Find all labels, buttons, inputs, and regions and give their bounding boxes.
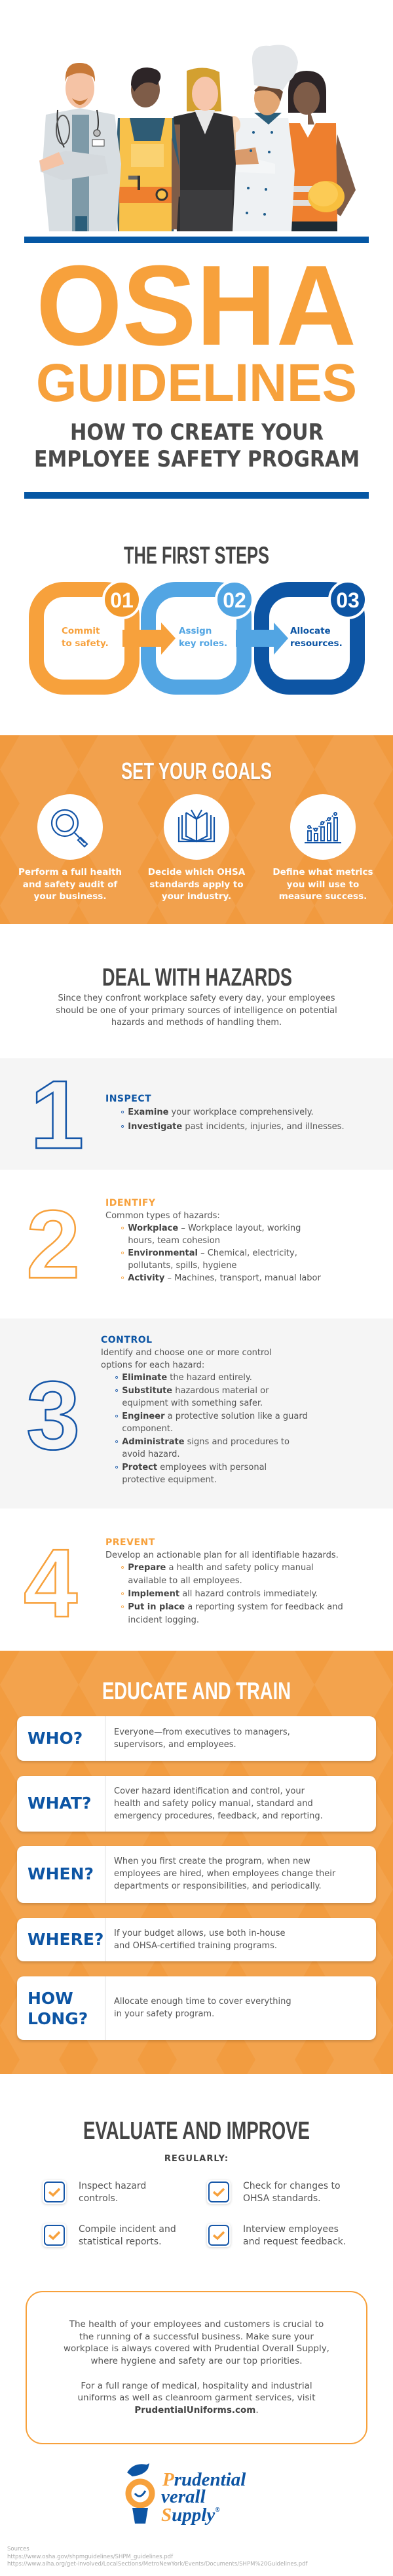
goal 1: audit: [18, 794, 122, 902]
prevent text: ∘ Put in place a reporting system for feedback and: [120, 1602, 343, 1612]
arrow 2: [236, 623, 288, 655]
logo: Prudential Overall Supply: [126, 2463, 246, 2526]
identify text: Common types of hazards:: [105, 1211, 220, 1221]
card: what: emergency procedures, feedback, and reporting.: [114, 1811, 323, 1821]
check item 2: OHSA standards.: [243, 2193, 321, 2204]
panel: 1 inspect: [0, 1058, 393, 1170]
identify text: pollutants, spills, hygiene: [128, 1261, 236, 1271]
card: where: [17, 1918, 376, 1961]
goal 1: audit: your business.: [34, 891, 106, 902]
hazards intro text: should be one of your primary sources of intelligence on potential: [56, 1006, 337, 1016]
card: who: Everyone—from executives to managers,: [114, 1727, 290, 1737]
check item 4: Interview employees: [243, 2224, 339, 2235]
figure: businesswoman: [172, 67, 236, 231]
check item 1: controls.: [79, 2193, 118, 2204]
card: when: [17, 1846, 376, 1903]
panel: 3 control: [0, 1318, 393, 1509]
goal 2: standards: your industry.: [162, 891, 231, 902]
callout: closing message: the running of a successful business. Make sure your: [79, 2332, 314, 2342]
control text: ∘ Administrate signs and procedures to: [114, 1436, 290, 1447]
control text: component.: [122, 1424, 173, 1434]
sources: Sources: [7, 2546, 29, 2552]
badge 02: 02: [223, 588, 246, 612]
step labels: Commit: [62, 626, 100, 636]
card: how long: Allocate enough time to cover everything: [114, 1997, 291, 2007]
check item 1: [41, 2180, 146, 2206]
card: how long: [17, 1976, 376, 2040]
step labels: Assign: [179, 626, 212, 636]
identify text: ∘ Workplace – Workplace layout, working: [120, 1223, 301, 1233]
prevent text: Develop an actionable plan for all identifiable hazards.: [105, 1550, 339, 1560]
control text: Identify and choose one or more control: [101, 1348, 272, 1358]
goal 3: metrics: [272, 794, 373, 902]
card: where: WHERE?: [28, 1930, 103, 1949]
logo: Prudential Overall Supply: ®: [215, 2507, 220, 2514]
goal 1: audit: Perform a full health: [18, 867, 122, 877]
card: where: and OHSA-certified training programs.: [114, 1941, 277, 1951]
control text: CONTROL: [101, 1335, 153, 1345]
step 1 ring: [37, 590, 132, 687]
control text: equipment with something safer.: [122, 1398, 263, 1408]
control text: ∘ Substitute hazardous material or: [114, 1385, 269, 1396]
check item 3: [41, 2223, 176, 2249]
identify text: ∘ Activity – Machines, transport, manual labor: [120, 1273, 321, 1283]
regularly label: REGULARLY:: [164, 2154, 229, 2164]
card: who: [17, 1716, 376, 1761]
goal 1: audit: and safety audit of: [23, 879, 117, 890]
callout: closing message: PrudentialUniforms.com.: [134, 2405, 259, 2415]
control text: protective equipment.: [122, 1475, 217, 1485]
step labels: key roles.: [179, 638, 227, 649]
goal 2: standards: Decide which OHSA: [148, 867, 245, 877]
check item 1: Inspect hazard: [79, 2181, 146, 2191]
badge 03: [329, 581, 366, 618]
prevent text: PREVENT: [105, 1537, 155, 1548]
card: when: employees are hired, when employees change their: [114, 1869, 335, 1879]
card: what: Cover hazard identification and control, your: [114, 1786, 305, 1796]
panel: 2 identify: [0, 1170, 393, 1318]
badge 02: [216, 581, 253, 618]
logo: Prudential Overall Supply: Supply: [161, 2505, 215, 2526]
control text: ∘ Eliminate the hazard entirely.: [114, 1373, 252, 1383]
inspect text: ∘ Examine your workplace comprehensively.: [120, 1107, 314, 1117]
callout: closing message: uniforms as well as cleanroom garment services, visit: [77, 2393, 316, 2403]
hazards intro text: Since they confront workplace safety every day, your employees: [58, 993, 335, 1003]
hazards intro text: [56, 993, 337, 1028]
goal 3: metrics: you will use to: [287, 879, 359, 890]
inspect text: ∘ Investigate past incidents, injuries, and illnesses.: [120, 1122, 345, 1132]
goal 3: metrics: measure success.: [279, 891, 367, 902]
sources: https://www.osha.gov/shpmguidelines/SHPM_guidelines.pdf: [7, 2553, 173, 2560]
card: when: departments or responsibilities, and periodically.: [114, 1881, 322, 1891]
panel: 4 prevent: [0, 1509, 393, 1651]
callout: closing message: The health of your employees and customers is crucial to: [69, 2319, 324, 2330]
check item 4: [206, 2223, 346, 2249]
check item 3: statistical reports.: [79, 2237, 162, 2247]
chain diagram: first steps: [29, 582, 365, 695]
icon: book: [164, 794, 229, 860]
sources: https://www.aiha.org/get-involved/LocalSections/MetroNewYork/Events/Documents/SHPM%20Guidelines.pdf: [7, 2561, 308, 2567]
callout: closing message: [26, 2291, 367, 2444]
title: OSHA GUIDELINES: GUIDELINES: [36, 353, 357, 413]
prevent text: available to all employees.: [128, 1576, 242, 1586]
title: OSHA GUIDELINES: HOW TO CREATE YOUR: [70, 419, 324, 446]
hazards intro text: hazards and methods of handling them.: [111, 1018, 282, 1028]
icon: magnifier: [37, 794, 103, 860]
card: who: supervisors, and employees.: [114, 1740, 236, 1750]
check item 2: [206, 2180, 341, 2206]
card: how long: LONG?: [28, 2009, 88, 2028]
card: what: WHAT?: [28, 1794, 91, 1813]
control text: options for each hazard:: [101, 1360, 204, 1370]
badge 01: [103, 581, 140, 618]
goal 3: metrics: Define what metrics: [272, 867, 373, 877]
step labels: [62, 626, 343, 649]
card: who: WHO?: [28, 1729, 83, 1748]
badge 03: 03: [336, 588, 360, 612]
card: what: health and safety policy manual, standard and: [114, 1799, 313, 1809]
check item 2: Check for changes to: [243, 2181, 341, 2191]
prevent text: ∘ Implement all hazard controls immediately.: [120, 1589, 318, 1599]
identify text: [105, 1198, 321, 1283]
control text: [101, 1335, 308, 1485]
panel: educate and train: [0, 1651, 393, 2074]
step labels: resources.: [290, 638, 343, 649]
card: when: When you first create the program, when new: [114, 1856, 310, 1866]
goal 2: standards: [148, 794, 245, 902]
panel: set your goals: [0, 735, 393, 924]
check item 3: Compile incident and: [79, 2224, 176, 2235]
step 2 ring: [148, 590, 244, 687]
hero illustration: workers: [39, 45, 356, 231]
top blue rule: [24, 237, 369, 243]
card: what: [17, 1776, 376, 1832]
control text: ∘ Engineer a protective solution like a guard: [114, 1412, 308, 1421]
figure: tradesman: [115, 67, 180, 231]
control text: avoid hazard.: [122, 1450, 180, 1459]
figure: construction woman: [282, 71, 359, 231]
identify text: hours, team cohesion: [128, 1236, 220, 1246]
control text: ∘ Protect employees with personal: [114, 1463, 267, 1472]
inspect text: INSPECT: [105, 1094, 151, 1104]
logo: Prudential Overall Supply: Prudential: [162, 2469, 246, 2490]
identify text: IDENTIFY: [105, 1198, 156, 1208]
prevent text: incident logging.: [128, 1615, 199, 1625]
card: how long: in your safety program.: [114, 2009, 214, 2019]
step labels: Allocate: [290, 626, 331, 636]
icon: bar chart: [290, 794, 356, 860]
check item 4: and request feedback.: [243, 2237, 346, 2247]
prevent text: [105, 1537, 343, 1625]
identify text: ∘ Environmental – Chemical, electricity,: [120, 1248, 297, 1258]
bottom blue rule: [24, 492, 369, 499]
callout: closing message: workplace is always covered with Prudential Overall Supply,: [64, 2343, 329, 2354]
prevent text: ∘ Prepare a health and safety policy manual: [120, 1563, 314, 1573]
card: where: If your budget allows, use both in-house: [114, 1929, 286, 1938]
goal 2: standards: standards apply to: [149, 879, 244, 890]
inspect text: [105, 1094, 345, 1132]
callout: closing message: For a full range of medical, hospitality and industrial: [81, 2381, 312, 2391]
card: how long: HOW: [28, 1989, 73, 2008]
sources: [7, 2546, 308, 2567]
card: when: WHEN?: [28, 1864, 94, 1883]
badge 01: 01: [110, 588, 134, 612]
checklist: [41, 2180, 346, 2249]
title: OSHA GUIDELINES: EMPLOYEE SAFETY PROGRAM: [34, 446, 360, 472]
heading: SET YOUR GOALS: [121, 758, 272, 784]
arrow 1: [122, 623, 176, 655]
figure: doctor: [39, 63, 121, 231]
step 3 ring: [262, 590, 358, 687]
step labels: to safety.: [62, 638, 109, 649]
figure: chef: [223, 45, 298, 231]
callout: closing message: where hygiene and safety are our top priorities.: [90, 2356, 303, 2366]
logo: Prudential Overall Supply: verall: [161, 2486, 206, 2507]
title: OSHA GUIDELINES: [34, 256, 360, 472]
